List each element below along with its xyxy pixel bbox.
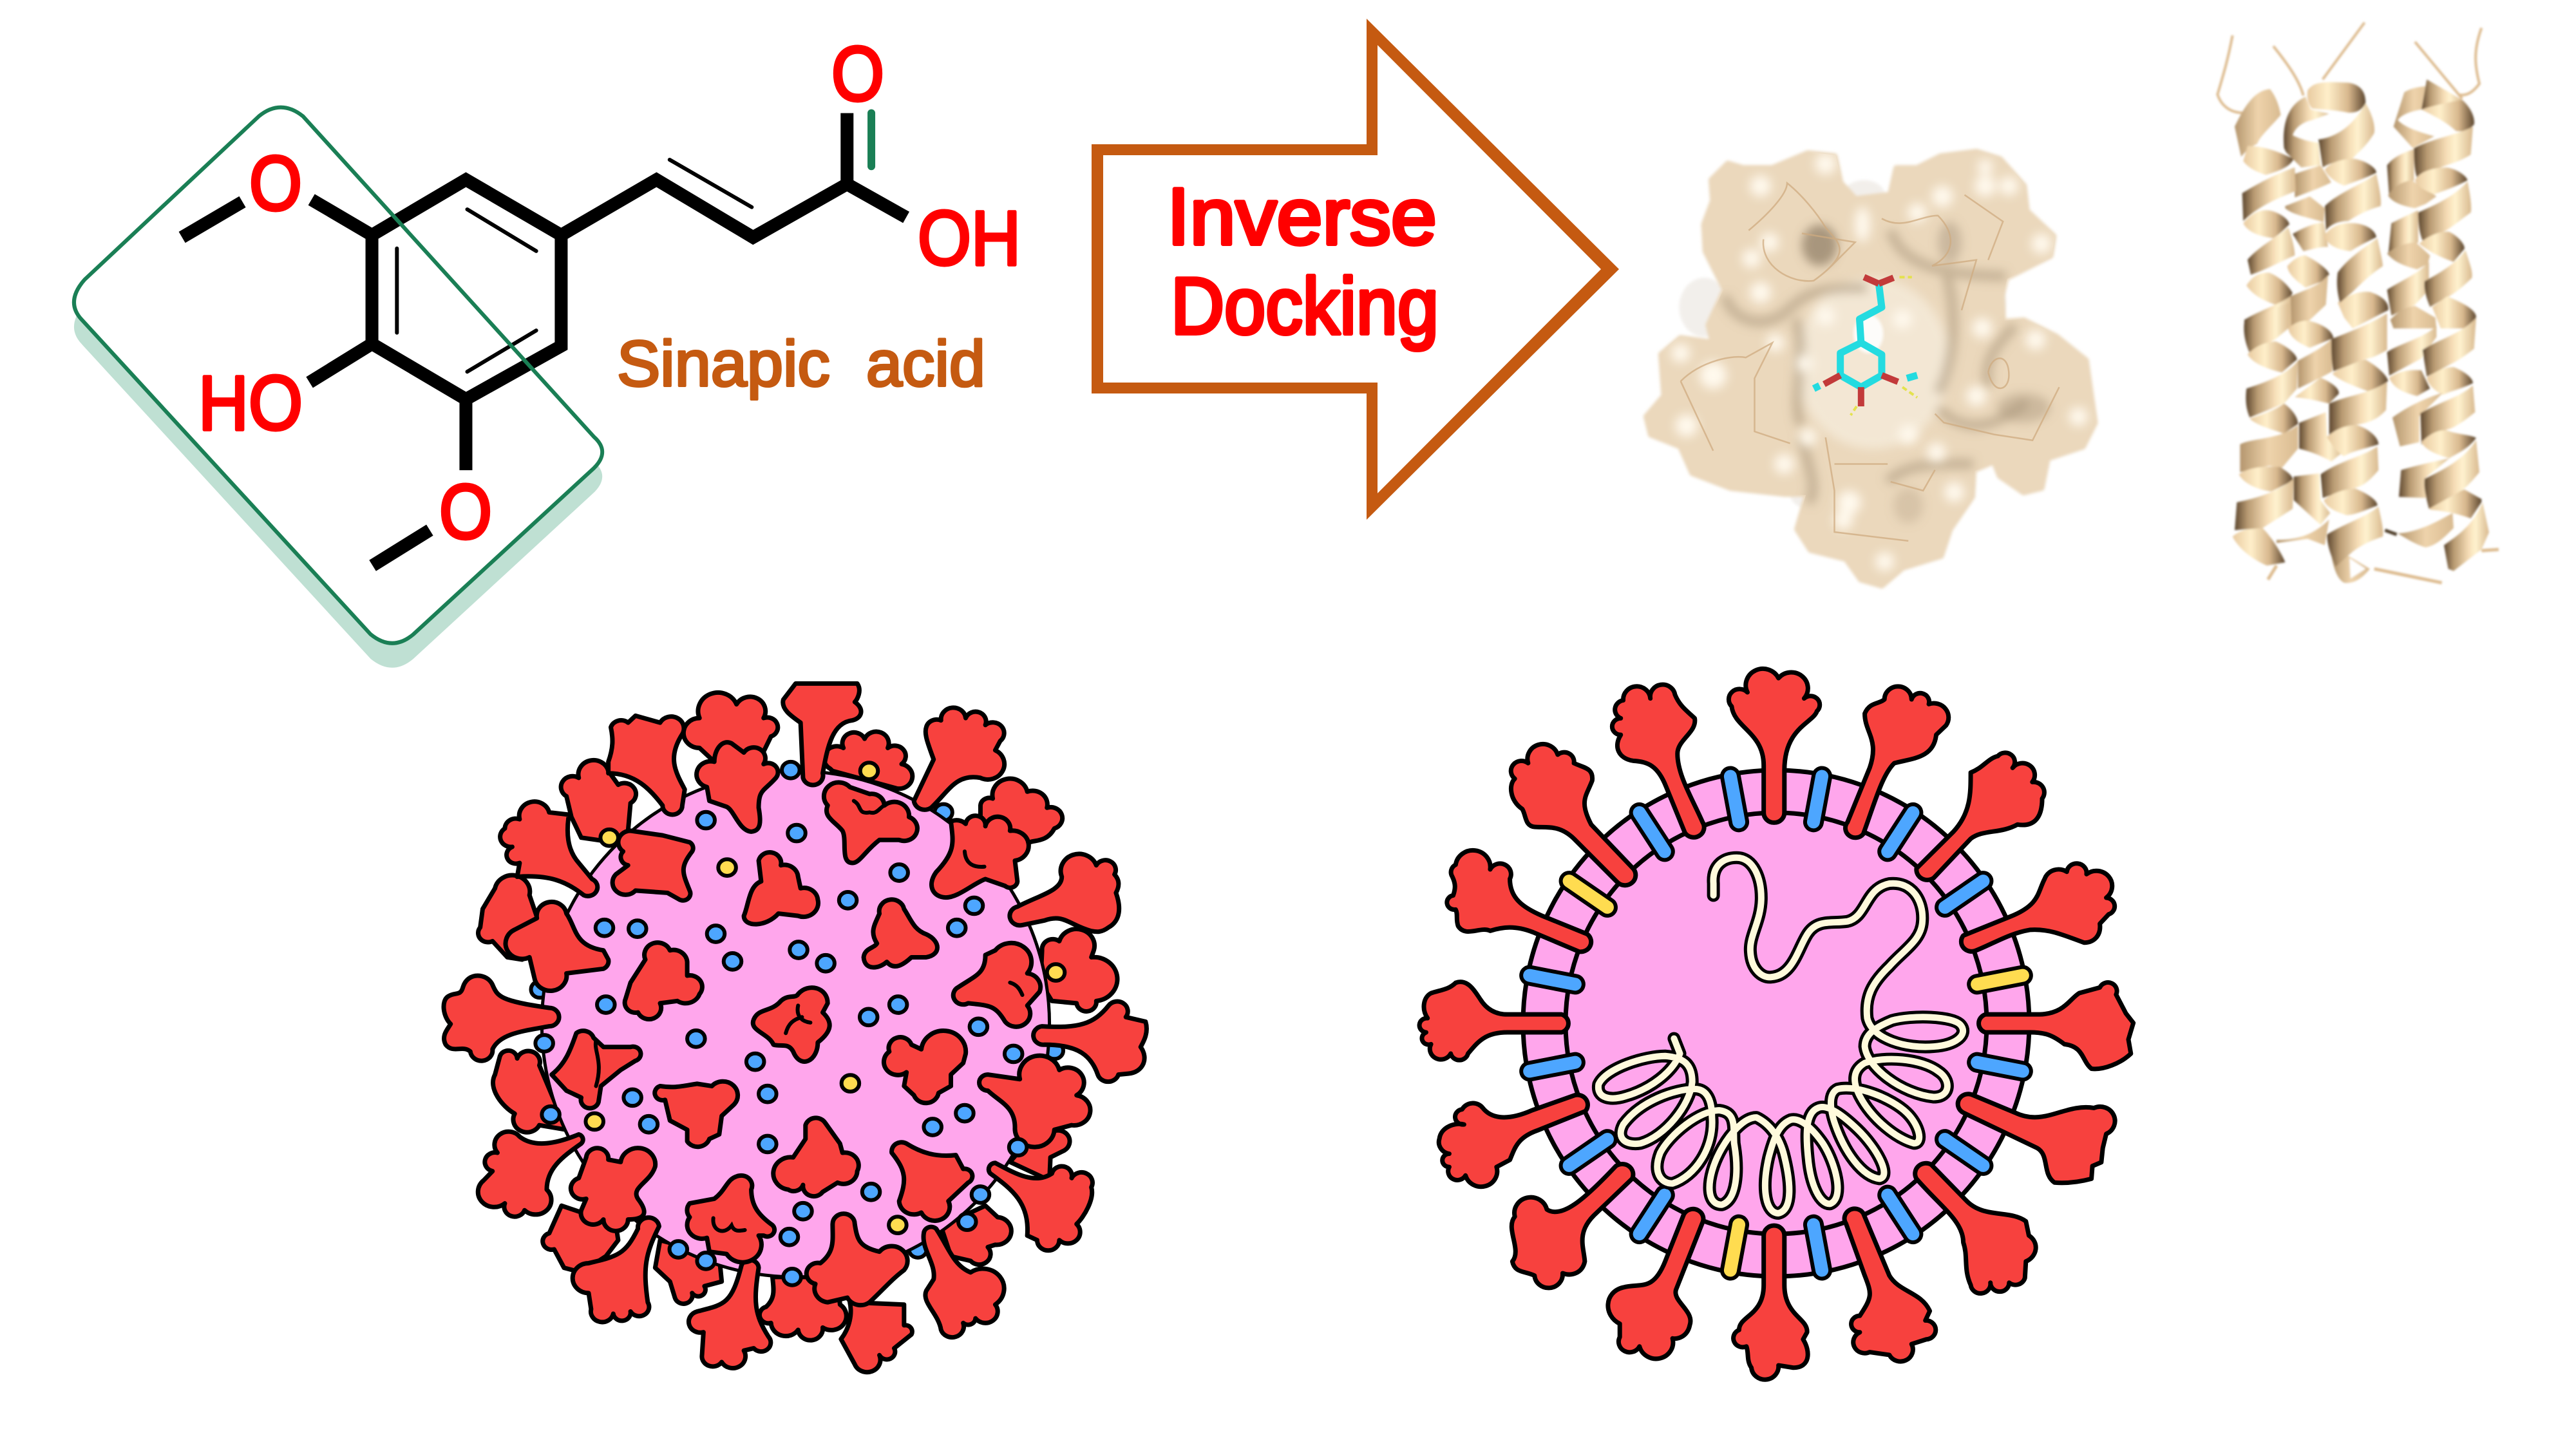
arrow label line 2: Docking bbox=[1171, 262, 1439, 351]
viral envelope bbox=[542, 771, 1050, 1277]
surface body bbox=[1647, 152, 2095, 585]
lower helix ribbons bbox=[2233, 303, 2499, 583]
surface spike tops bbox=[612, 782, 1041, 1262]
highlight box outline bbox=[74, 108, 602, 643]
back spike heads bbox=[478, 692, 1117, 1372]
atom label: methoxy oxygen top: O bbox=[249, 140, 302, 227]
arrow outline bbox=[1092, 19, 1619, 520]
spike fold details bbox=[596, 801, 1022, 1231]
blue membrane proteins bbox=[535, 762, 1027, 1285]
atom label: carbonyl oxygen: O bbox=[831, 31, 884, 117]
interior bbox=[1566, 813, 1987, 1234]
yellow envelope proteins bbox=[585, 762, 1065, 1233]
atom label: hydroxyl: OH bbox=[918, 195, 1021, 281]
atom label: methoxy oxygen bottom: O bbox=[439, 469, 492, 555]
panel: sinapic acid molecule bbox=[74, 31, 1021, 668]
surface shading bbox=[1671, 153, 2088, 571]
highlight shadow of rounded box bbox=[74, 132, 602, 668]
ligand bbox=[1814, 277, 1917, 415]
compound name: Sinapic acid bbox=[617, 328, 985, 400]
protein ribbon helices bbox=[2217, 23, 2499, 583]
highlight box fill bbox=[74, 108, 602, 643]
arrow label line 1: Inverse bbox=[1167, 173, 1437, 261]
RNA strand bbox=[1598, 858, 1963, 1213]
atom label: phenol hydroxyl: HO bbox=[198, 360, 303, 446]
backbone wires bbox=[1681, 183, 2059, 541]
outer spikes bbox=[444, 683, 1146, 1368]
protein surface with docked ligand bbox=[1647, 152, 2095, 585]
pocket opening bbox=[1853, 315, 1883, 353]
molecule bonds bbox=[182, 113, 906, 565]
membrane proteins bbox=[1520, 766, 2032, 1280]
upper helix ribbons bbox=[2217, 23, 2481, 328]
spike proteins bbox=[1419, 668, 2134, 1379]
coronavirus cross-section illustration bbox=[1419, 668, 2134, 1379]
dots behind the envelope bbox=[531, 804, 1063, 1258]
coronavirus surface illustration bbox=[444, 683, 1146, 1372]
arrow: inverse docking bbox=[1092, 19, 1619, 520]
ghost surface behind bbox=[1679, 180, 2006, 508]
membrane ring bbox=[1523, 770, 2029, 1276]
